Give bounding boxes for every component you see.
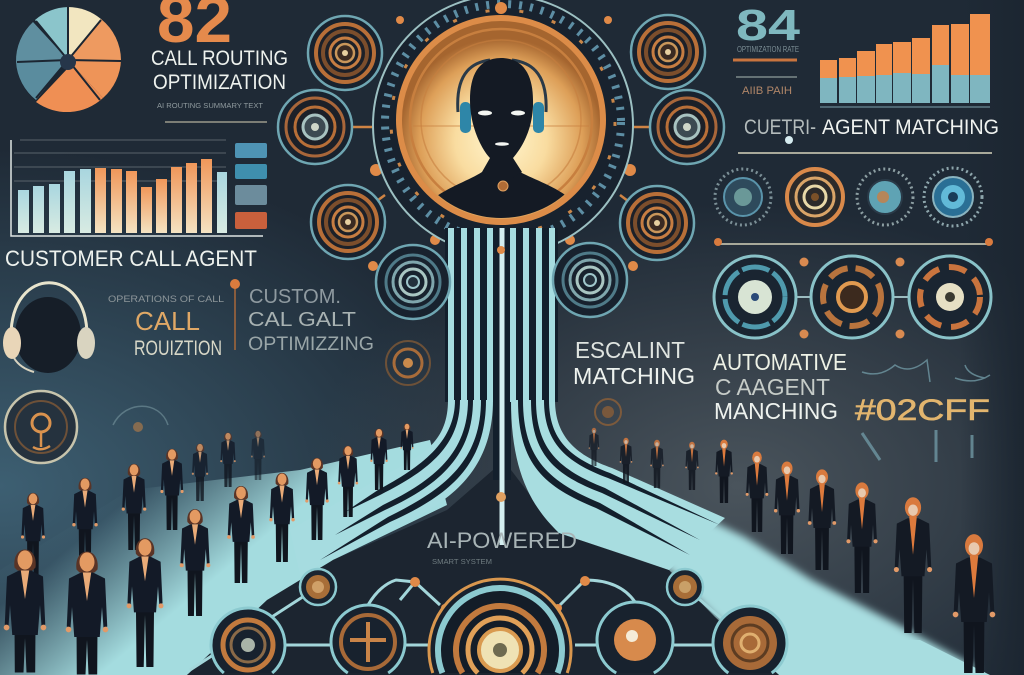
- text block: call routing: CALL: [135, 306, 200, 336]
- icon row: four rings: [715, 168, 982, 226]
- ring: lower left: [311, 185, 385, 259]
- text block: automative agent manching: MANCHING: [714, 398, 838, 424]
- panel: bar chart: [11, 140, 263, 236]
- panel: number 84: AIIB PAIH: [742, 85, 792, 97]
- ring: top left: [308, 16, 382, 90]
- small gauge doodle: [113, 406, 168, 432]
- text block: escalant matching: ESCALINT: [575, 337, 685, 363]
- ring: small left: [300, 569, 336, 605]
- ring: lower right: [620, 186, 694, 260]
- band dots: [391, 10, 615, 234]
- heading: call routing optimization: [151, 47, 288, 94]
- ring: bottom right: [597, 602, 673, 673]
- satellite node dots: [368, 16, 638, 271]
- dark lower field: [187, 470, 779, 675]
- panel: stacked bar chart: [820, 14, 990, 107]
- ring: orange: [811, 256, 893, 338]
- heading: call routing optimization: OPTIMIZATION: [153, 71, 286, 94]
- small caption: AI ROUTING SUMMARY TEXT: [157, 103, 264, 110]
- icon: headphones: [458, 60, 546, 133]
- ring: small right: [667, 569, 703, 605]
- glowing disc: [399, 18, 603, 222]
- ring: dial four: [924, 168, 982, 226]
- heading: custom agent matching: [744, 116, 999, 139]
- heading: AI-powered: [427, 528, 577, 566]
- divider with end dots: [714, 238, 993, 246]
- central AI agent medallion: [372, 0, 634, 244]
- lower node on central stream: [496, 492, 506, 502]
- silhouette: bust: [438, 172, 564, 218]
- panel: pie chart: [16, 7, 121, 112]
- panel: number 84: [733, 1, 801, 97]
- text block: custom call optimizing: [248, 286, 374, 355]
- small badge: [595, 399, 621, 425]
- left floor: [0, 440, 447, 675]
- text block: automative agent manching: C AAGENT: [715, 374, 830, 400]
- outer band: [373, 0, 633, 255]
- teal segments: [820, 65, 990, 103]
- ring: bottom far left: [211, 608, 285, 673]
- panel: number 84: 84: [736, 1, 801, 50]
- text block: custom call optimizing: CUSTOM.: [249, 286, 341, 308]
- heading: AI-powered: AI-POWERED: [427, 528, 577, 553]
- ring: dial two: [787, 169, 843, 225]
- colour code label: #02CFF: [855, 394, 990, 427]
- heading: call routing optimization: CALL ROUTING: [151, 47, 288, 70]
- crowd: left group: [4, 423, 414, 674]
- ring: cream: [909, 256, 991, 338]
- ring: dial three: [857, 169, 913, 225]
- panel: number 84: OPTIMIZATION RATE: [737, 45, 799, 54]
- orange segments: [820, 14, 990, 78]
- text block: call routing: ROUIZTION: [134, 337, 222, 360]
- ring: bottom left: [331, 605, 405, 673]
- heading: custom agent matching: AGENT MATCHING: [822, 116, 999, 139]
- ring: bottom right satellite: [553, 243, 627, 317]
- upper satellite rings: [278, 15, 724, 260]
- heading: AI-powered: SMART SYSTEM: [432, 559, 492, 566]
- icon: left ring with key: [5, 391, 77, 463]
- ring: teal: [714, 256, 796, 338]
- ring: right: [650, 90, 724, 164]
- ring: dial one: [715, 169, 771, 225]
- ring: left: [278, 90, 352, 164]
- chart legend: [235, 143, 267, 229]
- doodles: [862, 360, 990, 462]
- band ticks: [385, 4, 621, 240]
- stripes: central data streams: [290, 228, 725, 575]
- ring: bottom centre: [429, 579, 571, 673]
- connector lines: satellites to core: [315, 60, 687, 223]
- ring: top right: [631, 15, 705, 89]
- icon: headset: [3, 283, 95, 373]
- dropping node on central stream: [497, 246, 505, 254]
- top node: [495, 2, 507, 14]
- heading: customer call agent: CUSTOMER CALL AGENT: [5, 246, 257, 271]
- orange nodes: bottom network: [410, 576, 590, 612]
- text block: automative agent manching: AUTOMATIVE: [713, 349, 847, 375]
- text block: call routing: [108, 294, 224, 360]
- neck pendant: [498, 181, 508, 191]
- inner rings: [410, 29, 592, 211]
- silhouette: head: [470, 58, 533, 185]
- text block: automative agent manching: [713, 349, 847, 424]
- text block: custom call optimizing: OPTIMIZZING: [248, 334, 374, 355]
- ring: bottom left satellite: [376, 245, 450, 319]
- right floor: [559, 445, 990, 675]
- divider: [738, 152, 992, 154]
- text block: custom call optimizing: CAL GALT: [248, 309, 356, 331]
- icon: small orange ring: [386, 341, 430, 385]
- text block: call routing: OPERATIONS OF CALL: [108, 294, 224, 304]
- ring: bottom far right: [713, 606, 787, 673]
- text block: escalant matching: MATCHING: [573, 363, 695, 389]
- connectors: bottom network: [190, 580, 750, 670]
- orange pin divider: [230, 279, 240, 350]
- small marker line: [165, 121, 267, 123]
- text block: escalant matching: [573, 337, 695, 389]
- heading: custom agent matching: CUETRI-: [744, 116, 816, 139]
- eyes and mouth: [478, 110, 525, 146]
- icon row: three large rings: [714, 256, 991, 338]
- dot marker: [785, 136, 793, 144]
- crowd: right group: [589, 428, 995, 673]
